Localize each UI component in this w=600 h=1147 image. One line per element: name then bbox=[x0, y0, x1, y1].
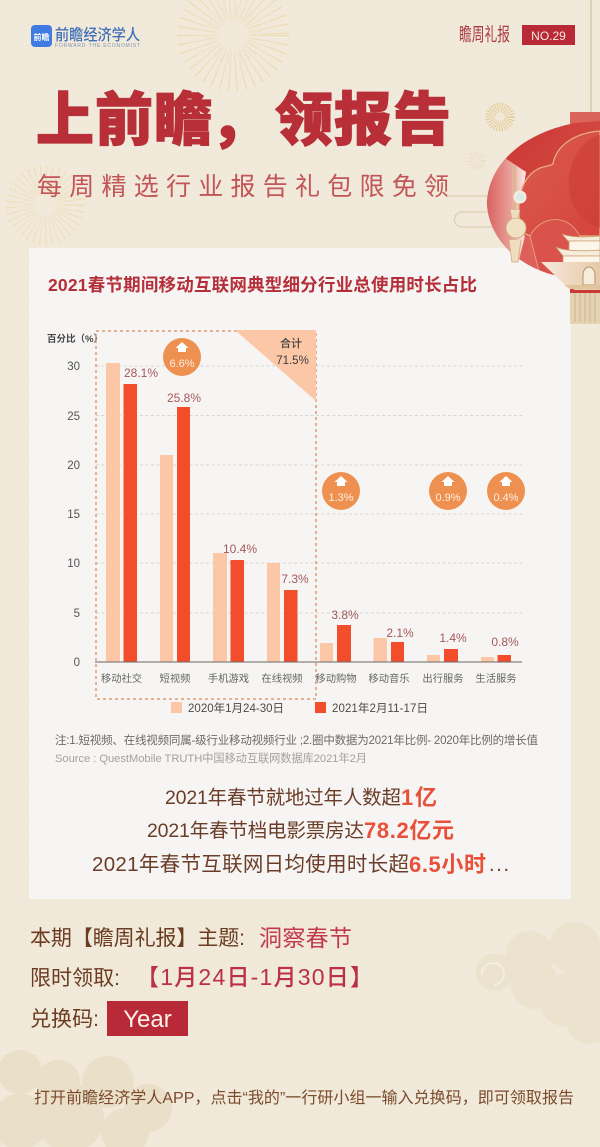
decorative pill lines bbox=[447, 196, 495, 227]
y axis labels: 15 bbox=[67, 509, 80, 521]
value labels: 7.3% bbox=[281, 572, 309, 586]
series label: 瞻周礼报: 瞻周礼报 bbox=[459, 25, 510, 46]
firework: small pale bbox=[471, 155, 483, 167]
y axis labels: 20 bbox=[67, 460, 80, 472]
growth badge: short video: 6.6% bbox=[169, 358, 195, 370]
y axis labels: 30 bbox=[67, 361, 80, 373]
x axis labels: 移动音乐 bbox=[368, 672, 410, 685]
cloud: right bbox=[476, 922, 600, 1044]
topic line: 本期【瞻周礼报】主题: bbox=[30, 927, 245, 950]
total callout: 合计 71.5%: 合计 bbox=[280, 336, 302, 350]
footer instruction: 打开前瞻经济学人APP，点击“我的”一行研小组一输入兑换码，即可领取报告 bbox=[34, 1089, 574, 1107]
growth badge: local life: 0.4% bbox=[493, 492, 519, 504]
stat line 3: 2021年春节互联网日均使用时长超 bbox=[92, 853, 409, 876]
growth badge: local life bbox=[487, 472, 525, 510]
x axis labels: 出行服务 bbox=[422, 672, 464, 685]
x axis labels: 在线视频 bbox=[261, 672, 303, 685]
source: Source : QuestMobile TRUTH中国移动互联网数据库2021年2月 bbox=[55, 751, 367, 765]
value labels: 0.8% bbox=[491, 635, 519, 649]
x axis labels: 短视频 bbox=[160, 672, 190, 685]
bar chart bbox=[67, 330, 525, 699]
main title bbox=[36, 88, 451, 153]
growth badge: mobile shopping bbox=[322, 472, 360, 510]
stat line 2 bbox=[147, 818, 454, 843]
firework: top center bbox=[197, 0, 269, 71]
growth badge: travel bbox=[429, 472, 467, 510]
stat line 3: 6.5小时 bbox=[409, 852, 486, 877]
stat line 2: 78.2亿元 bbox=[364, 818, 454, 843]
date line: 限时领取: bbox=[30, 967, 120, 990]
bars: 2020 series bbox=[106, 363, 494, 662]
redeem code line: 兑换码: bbox=[30, 1008, 99, 1031]
palace gate bbox=[541, 234, 600, 290]
stat line 2: 2021年春节档电影票房达 bbox=[147, 820, 364, 842]
x axis labels bbox=[101, 672, 517, 685]
legend bbox=[171, 701, 428, 715]
firework: left bbox=[19, 179, 71, 231]
lantern illustration bbox=[480, 0, 600, 324]
growth badge: travel: 0.9% bbox=[435, 492, 461, 504]
lantern bottom cap and tassel bbox=[570, 278, 600, 324]
firework: small gold bbox=[490, 108, 510, 126]
footnote: 注:1.短视频、在线视频同属-级行业移动视频行业 ;2.圈中数据为2021年比例- 2020年比例的增长值 bbox=[55, 733, 538, 747]
legend: 2021年2月11-17日 bbox=[332, 701, 428, 715]
y axis labels: 25 bbox=[67, 411, 80, 423]
main title: 领报告 bbox=[275, 88, 451, 153]
logo: 前瞻 bbox=[34, 32, 50, 42]
growth badge: mobile shopping: 1.3% bbox=[328, 492, 354, 504]
value labels: 25.8% bbox=[167, 391, 201, 405]
value labels: 2.1% bbox=[386, 626, 414, 640]
issue badge: NO.29 bbox=[531, 29, 566, 43]
panel: chart card bbox=[29, 248, 571, 899]
redeem code line bbox=[30, 1001, 188, 1036]
redeem code line: Year bbox=[123, 1006, 172, 1033]
y axis labels: 0 bbox=[74, 657, 80, 669]
logo bbox=[31, 25, 140, 49]
topic line bbox=[30, 925, 352, 951]
lantern top cap bbox=[570, 112, 600, 126]
x axis labels: 手机游戏 bbox=[208, 672, 249, 685]
y axis labels bbox=[67, 361, 80, 669]
x axis labels: 移动社交 bbox=[101, 672, 142, 685]
legend: 2020年1月24-30日 bbox=[188, 701, 284, 715]
logo: FORWARD·THE ECONOMIST bbox=[55, 43, 140, 49]
stat line 1: 1亿 bbox=[401, 785, 437, 810]
x axis labels: 生活服务 bbox=[475, 672, 517, 685]
cloud: left bbox=[0, 1050, 172, 1147]
growth badge: short video bbox=[163, 338, 201, 376]
bars: 2021 series bbox=[124, 384, 511, 662]
chart heading: 2021春节期间移动互联网典型细分行业总使用时长占比 bbox=[48, 275, 477, 295]
main title: ， bbox=[210, 88, 268, 153]
topic line: 洞察春节 bbox=[259, 925, 352, 951]
value labels: 3.8% bbox=[331, 608, 359, 622]
tower bbox=[506, 165, 526, 262]
x axis labels: 移动购物 bbox=[315, 672, 357, 685]
value labels: 28.1% bbox=[124, 366, 158, 380]
highlight box: dashed outline bbox=[96, 331, 316, 699]
lantern body bbox=[487, 121, 600, 276]
value labels bbox=[124, 366, 519, 649]
stat line 1: 2021年春节就地过年人数超 bbox=[165, 787, 401, 809]
y axis title: 百分比（%） bbox=[47, 333, 103, 345]
issue badge bbox=[522, 25, 575, 45]
main title: 上前瞻 bbox=[36, 88, 212, 153]
y axis labels: 10 bbox=[67, 558, 80, 570]
date line bbox=[30, 964, 373, 990]
value labels: 10.4% bbox=[223, 542, 257, 556]
stat line 3 bbox=[92, 852, 509, 877]
subtitle: 每周精选行业报告礼包限免领 bbox=[37, 173, 449, 201]
stat line 3: ... bbox=[489, 854, 509, 876]
date line: 【1月24日-1月30日】 bbox=[136, 964, 373, 990]
y axis labels: 5 bbox=[74, 608, 80, 620]
total callout: 合计 71.5% bbox=[235, 330, 316, 401]
value labels: 1.4% bbox=[439, 631, 467, 645]
total callout: 合计 71.5%: 71.5% bbox=[276, 355, 309, 367]
logo: 前瞻经济学人 bbox=[55, 25, 140, 44]
